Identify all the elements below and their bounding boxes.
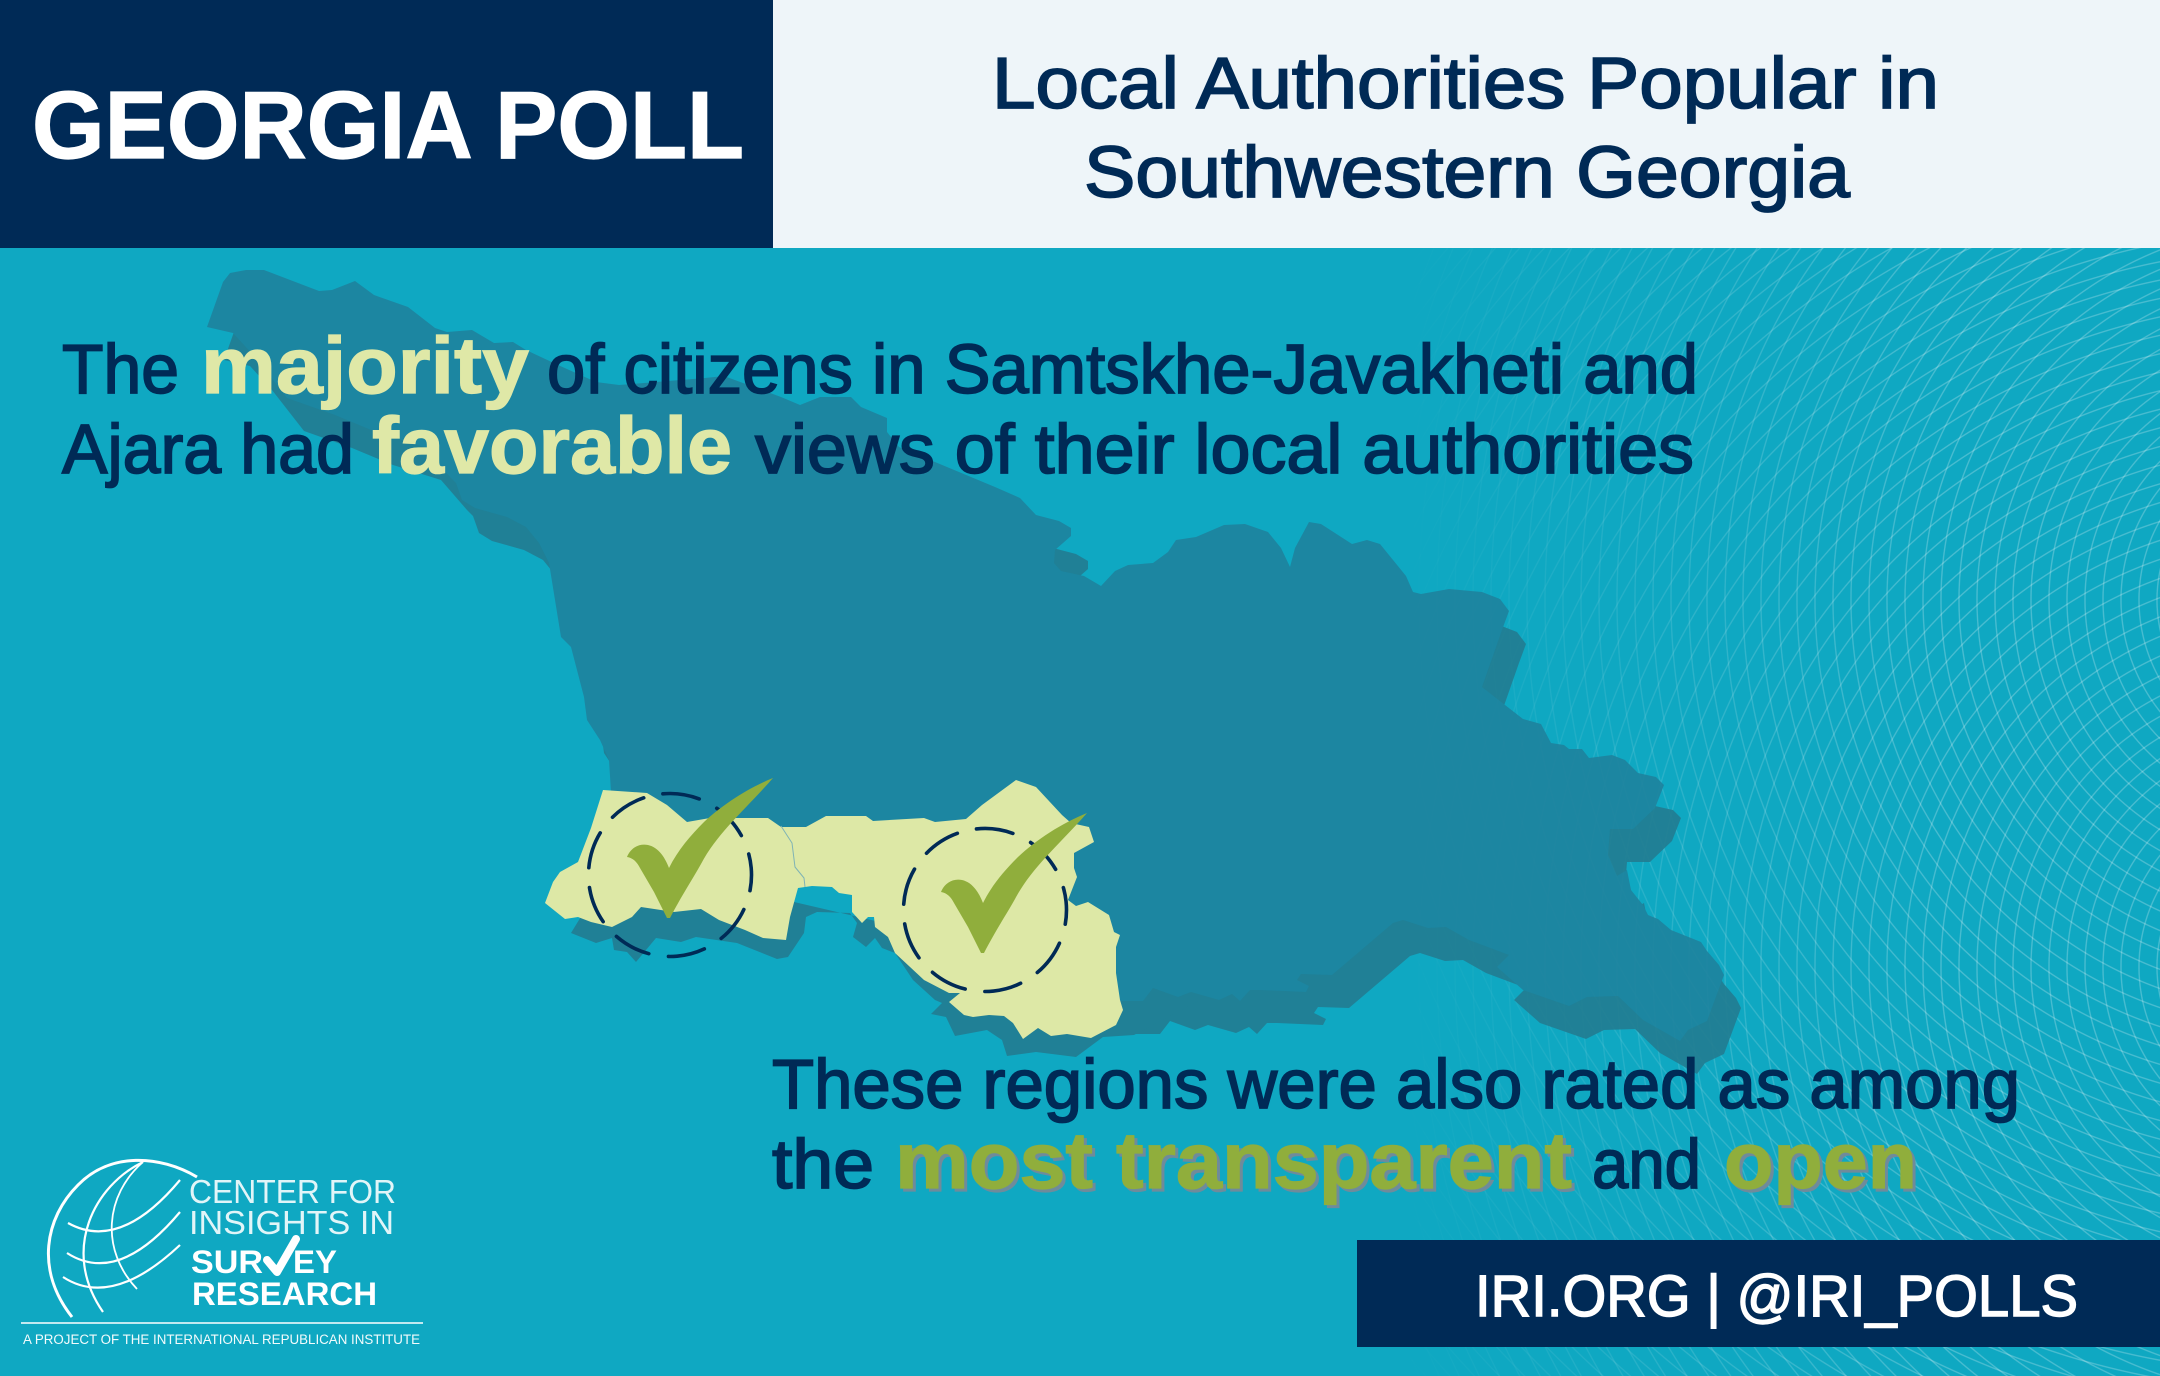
title bbox=[992, 44, 1939, 213]
footer bar bbox=[1357, 1240, 2160, 1347]
text block: majority favorable statement: of citizens in Samtskhe-Javakheti and bbox=[547, 330, 1698, 408]
map shadow bbox=[224, 303, 1741, 1074]
map: Georgia silhouette with shadow bbox=[207, 270, 1741, 1074]
header panel: light block bbox=[773, 0, 2160, 248]
logo wordmark bbox=[189, 1173, 396, 1312]
header panel: navy block bbox=[0, 0, 773, 248]
title: Local Authorities Popular in bbox=[992, 44, 1939, 124]
text block: most transparent and open statement: open bbox=[1724, 1116, 1917, 1205]
heading: GEORGIA POLL: GEORGIA POLL bbox=[32, 72, 744, 179]
text block: most transparent and open statement: and bbox=[1592, 1125, 1701, 1203]
text block: majority favorable statement: majority bbox=[201, 321, 530, 410]
highlighted regions: Ajara and Samtskhe-Javakheti bbox=[545, 780, 1123, 1039]
footer links: IRI.ORG | @IRI_POLLS bbox=[1475, 1264, 2078, 1329]
text block: majority favorable statement bbox=[62, 321, 1698, 490]
logo wordmark: RESEARCH bbox=[192, 1276, 377, 1312]
icon: globe bbox=[48, 1160, 197, 1317]
logo wordmark: CENTER FOR bbox=[189, 1173, 396, 1210]
title: Southwestern Georgia bbox=[1084, 133, 1851, 213]
text block: majority favorable statement: The bbox=[62, 330, 179, 408]
icon: check mark right bbox=[941, 813, 1087, 953]
logo: Center for Insights in Survey Research bbox=[21, 1160, 423, 1347]
logo wordmark: INSIGHTS IN bbox=[189, 1204, 394, 1241]
text block: majority favorable statement: views of their local authorities bbox=[755, 410, 1694, 488]
dashed circle: Ajara bbox=[582, 787, 758, 963]
text block: majority favorable statement: favorable bbox=[372, 401, 732, 490]
logo wordmark: EY bbox=[293, 1244, 337, 1280]
map body bbox=[207, 270, 1724, 1041]
text block: majority favorable statement: Ajara had bbox=[62, 410, 354, 488]
logo wordmark: SUR bbox=[191, 1244, 263, 1280]
text block: most transparent and open statement: most transparent bbox=[895, 1116, 1572, 1205]
icon: check mark left bbox=[627, 778, 773, 918]
text block: most transparent and open statement bbox=[772, 1045, 2020, 1205]
text block: most transparent and open statement: These regions were also rated as among bbox=[772, 1045, 2020, 1123]
text block: most transparent and open statement: the bbox=[772, 1125, 874, 1203]
dashed circle: Samtskhe-Javakheti bbox=[895, 820, 1075, 1000]
logo tagline: A PROJECT OF THE INTERNATIONAL REPUBLICAN INSTITUTE bbox=[23, 1332, 420, 1347]
icon: logo check mark bbox=[267, 1239, 296, 1272]
